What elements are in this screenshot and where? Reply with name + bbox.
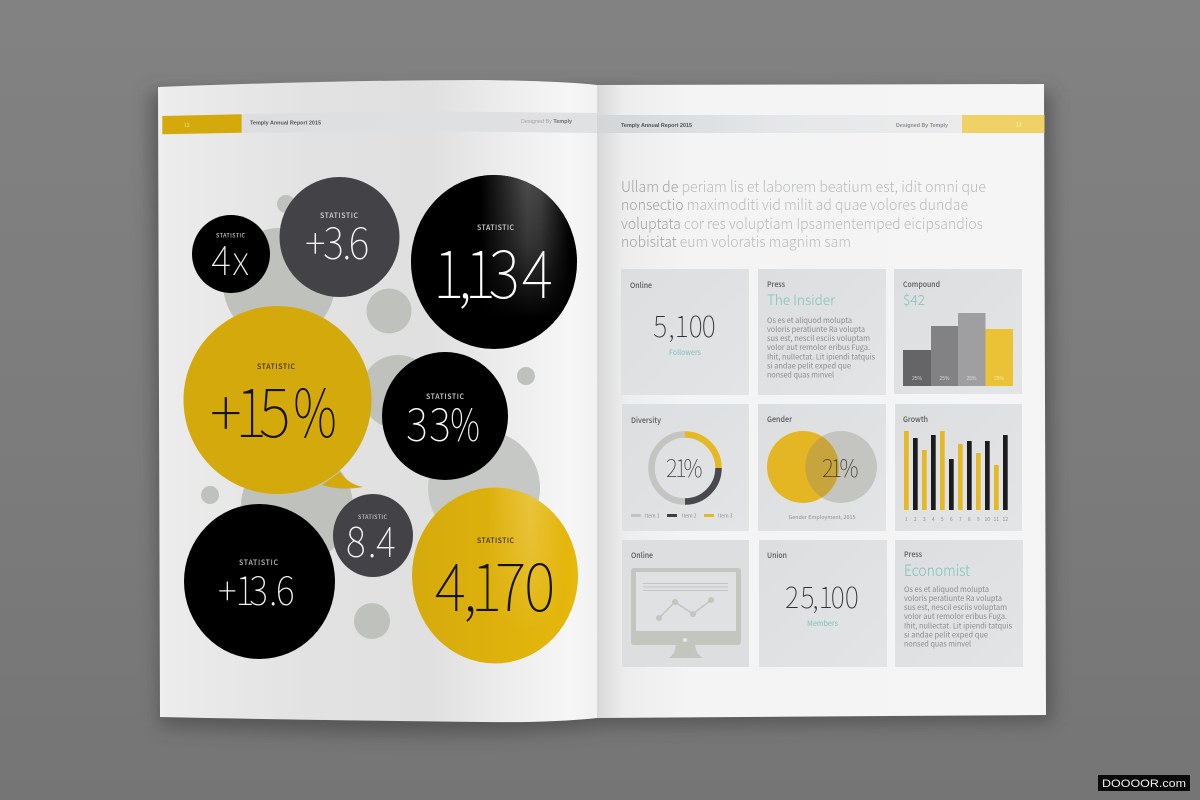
card: press economist: nonsed quas minvel [904,638,971,650]
stat bubble: 33%: 33 [406,390,451,455]
card: diversity donut [622,404,749,531]
card: press the insider: volor aut remolor eribus Fuga. [767,342,870,353]
card: press the insider [758,269,886,395]
stat bubble: 4,170 [412,488,578,664]
card: press the insider: Os es et aliquod molupta [767,315,852,326]
card: compound bar chart: 25% [939,376,950,382]
card: diversity donut: Item 2 [682,512,697,520]
stat bubble: 1,134: STATISTIC [477,223,514,233]
card: compound bar chart [894,269,1022,394]
background grey bubbles [201,195,540,639]
card: press economist: Ihit, nullectat. Lit ipiendi tatquis [904,620,1012,632]
watermark [1098,775,1190,791]
stat bubble: 8.4: STATISTIC [358,513,387,521]
right page number tab [962,115,1044,133]
card: online followers: Followers [669,347,701,358]
card: online monitor [622,540,749,667]
card: online followers: Online [630,280,652,291]
stat bubble: +13.6 [184,504,335,659]
card: press the insider: si andae pelit exped que [767,360,851,372]
watermark: DOOOOR.com [1102,778,1186,790]
card: growth bars: 11 [994,516,999,523]
left designer credit: Designed By Temply [521,119,573,125]
stat bubble: 4,170: 4,170 [435,536,555,630]
card: growth bars: 12 [1003,516,1008,523]
stat speech bubble: +15% [184,306,372,494]
card: growth bars [895,404,1022,531]
card: press economist: Economist [904,557,970,581]
card: press economist: Os es et aliquod molupta [904,584,989,595]
card: growth bars: 4 [932,516,935,523]
card: diversity donut: Item 3 [718,512,733,520]
card: diversity donut: Item 1 [645,512,660,520]
card: online monitor: Online [631,550,653,561]
card: growth bars: Growth [903,414,928,425]
card: growth bars: 10 [985,516,990,523]
card: compound bar chart: $42 [903,290,925,310]
right designer credit: Designed By Temply [896,123,949,129]
card: press economist: voloris peratiunte Ra volupta [904,593,1002,604]
card: press the insider: Ihit, nullectat. Lit ipiendi tatquis [767,352,875,362]
right page header band [597,115,962,133]
card: press economist: sus est, nescil esciis voluptam [904,602,1007,613]
stat bubble: 1,134 [411,175,577,349]
card: gender venn: Gender [767,414,793,425]
card: online followers: 5,100 [653,305,716,346]
stat bubble: +3.6: STATISTIC [320,211,358,221]
stat bubble: 8.4: 8.4 [346,510,396,569]
card: press economist: si andae pelit exped que [904,630,988,640]
lead paragraph [621,176,986,252]
card: growth bars: 2 [914,516,917,523]
card: diversity donut: 21 [666,449,687,484]
card: growth bars: 3 [923,516,926,523]
lead paragraph: nobisitat eum voloratis magnim sam [621,231,851,252]
left page header band [242,111,597,133]
lead paragraph: Ullam de periam lis et laborem beatium est, idit omni que [621,176,986,197]
left page number: 13 [184,123,190,129]
icon: monitor with line chart [631,568,741,658]
card: union members: 25,100 [785,576,859,617]
stat bubble: +13.6: +13.6 [218,560,295,616]
stat bubble: 4x: STATISTIC [216,232,245,240]
stat bubble: +13.6: STATISTIC [239,558,278,568]
card: gender venn: Gender Employment, 2015 [788,514,856,521]
card: growth bars: 8 [968,516,971,523]
card: compound bar chart: Compound [903,279,940,290]
stat bubble: 1,134: 1,134 [433,223,553,317]
stat bubble: 4,170: STATISTIC [477,536,514,546]
card: union members: Union [767,550,787,561]
stat bubble: +3.6: +3.6 [305,209,369,271]
stat bubble: 33% [382,352,508,480]
card: compound bar chart: 25% [912,376,923,382]
stat bubble: +3.6 [280,177,400,297]
card: press the insider: nonsed quas minvel [767,370,834,380]
stat bubble: 4x: 4x [211,228,249,287]
stat bubble: 8.4 [333,494,413,577]
card: press the insider: voloris peratiunte Ra volupta [767,324,865,335]
card: gender venn [758,404,886,531]
card: diversity donut: % [684,450,703,484]
right page number: 13 [1016,122,1022,128]
card: growth bars: 6 [950,516,953,523]
stat speech bubble: +15%: +15 [210,361,291,457]
right running title: Temply Annual Report 2015 [621,123,692,129]
card: gender venn: 21 [822,449,842,484]
card: press the insider: The Insider [767,290,836,310]
card: press the insider: sus est, nescil esciis voluptam [767,333,870,344]
card: diversity donut: Diversity [631,415,661,426]
card: compound bar chart: 25% [966,376,977,382]
stat bubble: 4x [192,215,270,293]
stat bubble: 33%: STATISTIC [426,392,464,402]
card: press economist: volor aut remolor eribus Fuga. [904,611,1007,622]
card: online followers [621,269,749,395]
stat bubble: 33%: % [450,390,480,455]
right page [597,84,1046,718]
lead paragraph: voluptata cor res voluptiam Ipsamentemped eicipsandios [621,213,983,234]
card: growth bars: 9 [977,516,980,523]
stat speech bubble: +15%: % [293,360,337,456]
card: press the insider: Press [767,279,785,290]
card: compound bar chart: 25% [994,376,1005,382]
book shadow [150,90,1052,734]
card: growth bars: 7 [959,516,962,523]
left running title: Temply Annual Report 2015 [250,120,321,126]
lead paragraph: nonsectio maximoditi vid milit ad quae volores dundae [621,194,968,215]
card: union members [759,540,887,667]
left page number tab [162,114,242,134]
stat speech bubble: +15%: STATISTIC [257,362,295,372]
card: union members: Members [807,618,838,629]
card: press economist: Press [904,549,922,560]
card: gender venn: % [840,450,859,484]
card: growth bars: 5 [941,516,944,523]
card: growth bars: 1 [905,516,908,523]
left page [158,80,597,722]
card: press economist [895,540,1023,667]
